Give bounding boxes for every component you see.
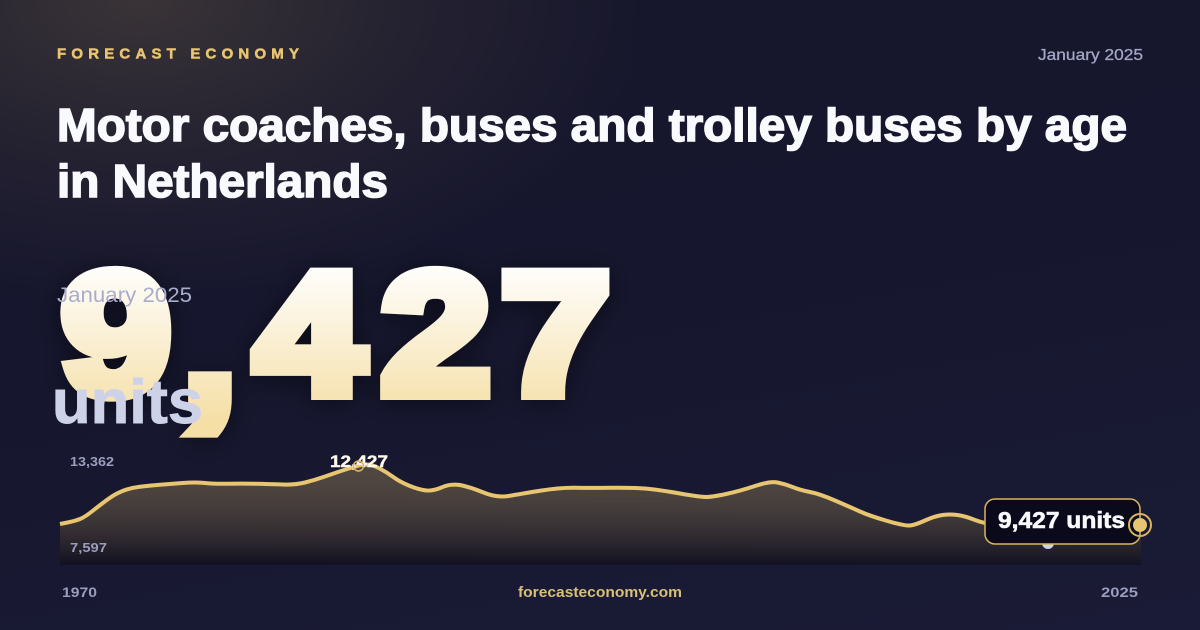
big number value: ,: [182, 249, 237, 441]
chart: area line: [60, 465, 1141, 565]
low point marker: [1042, 537, 1054, 549]
end point marker: [1129, 514, 1151, 536]
chart line: [60, 465, 1000, 526]
current value callout: [985, 499, 1140, 544]
chart area fill: [60, 465, 1141, 565]
peak marker: [354, 461, 364, 471]
axis max label: 13,362: [70, 454, 114, 469]
big number value: 7: [501, 238, 610, 430]
x axis end year: 2025: [1101, 584, 1138, 600]
title: Motor coaches, buses and trolley buses by age: [57, 99, 1127, 151]
current value callout: 9,427 units: [998, 507, 1125, 533]
title: in Netherlands: [57, 155, 388, 207]
big number value: [62, 238, 610, 441]
date top right: January 2025: [1038, 47, 1143, 64]
overlay date label: January 2025: [57, 284, 192, 307]
big number value: 9: [62, 238, 171, 430]
title: [57, 99, 1127, 207]
axis min label: 7,597: [70, 540, 107, 555]
peak value label: 12,427: [330, 452, 388, 471]
x axis start year: 1970: [62, 584, 97, 600]
big number value: 4: [255, 238, 364, 430]
big number value: 2: [381, 238, 490, 430]
eyebrow: brand label: FORECAST ECONOMY: [57, 46, 299, 62]
footer site: forecasteconomy.com: [518, 584, 682, 601]
overlay unit label: units: [52, 368, 203, 437]
